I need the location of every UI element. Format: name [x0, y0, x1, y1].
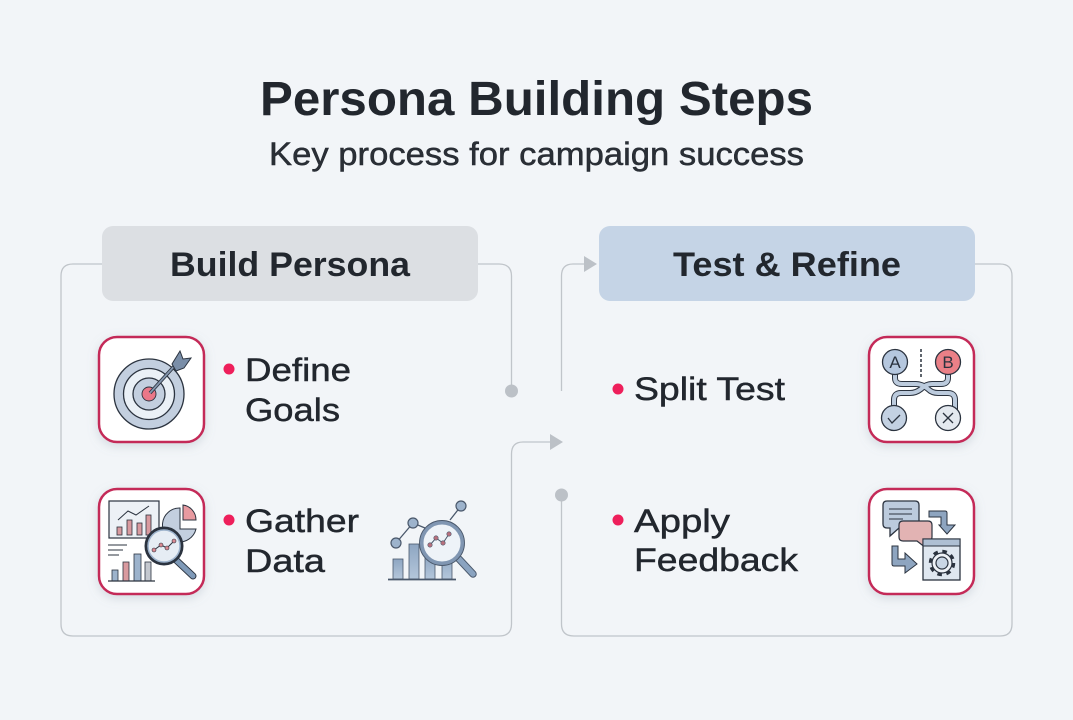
subtitle: Key process for campaign success — [269, 136, 804, 172]
panel: test and refine — [555, 226, 1012, 636]
bullet and label: apply feedback — [612, 503, 799, 578]
bullet and label: gather data: Data — [245, 543, 325, 579]
icon: target with arrow — [99, 337, 204, 442]
bullet and label: gather data: Gather — [245, 503, 359, 539]
heading: test and refine: Test & Refine — [673, 246, 901, 284]
heading: build persona: Build Persona — [170, 246, 411, 284]
connector dot: build persona exit — [505, 384, 518, 398]
bullet and label: define goals: Goals — [245, 392, 340, 428]
connector: arrow into heading — [562, 256, 597, 391]
icon: feedback loop with gear — [869, 489, 974, 594]
connector: arrow into panel two — [550, 434, 563, 450]
icon: A/B split test — [869, 337, 974, 442]
bullet and label: apply feedback: Feedback — [634, 542, 799, 578]
bullet and label: gather data — [224, 503, 359, 579]
title: Persona Building Steps — [260, 73, 813, 126]
bullet and label: define goals: Define — [245, 352, 351, 388]
bullet and label: define goals — [224, 352, 351, 428]
icon: magnifier over bar chart — [388, 501, 473, 580]
connector dot: feedback loop — [555, 488, 568, 502]
heading: build persona — [102, 226, 478, 301]
bullet and label: apply feedback: Apply — [634, 503, 730, 539]
icon: A/B split test: A — [889, 353, 901, 372]
icon: A/B split test: B — [942, 353, 954, 372]
panel outline: build persona — [61, 264, 550, 636]
panel outline: test and refine — [562, 264, 1012, 636]
panel: build persona — [61, 226, 550, 636]
heading: test and refine — [599, 226, 975, 301]
icon: data report — [99, 489, 204, 594]
bullet and label: split test: Split Test — [634, 371, 785, 407]
